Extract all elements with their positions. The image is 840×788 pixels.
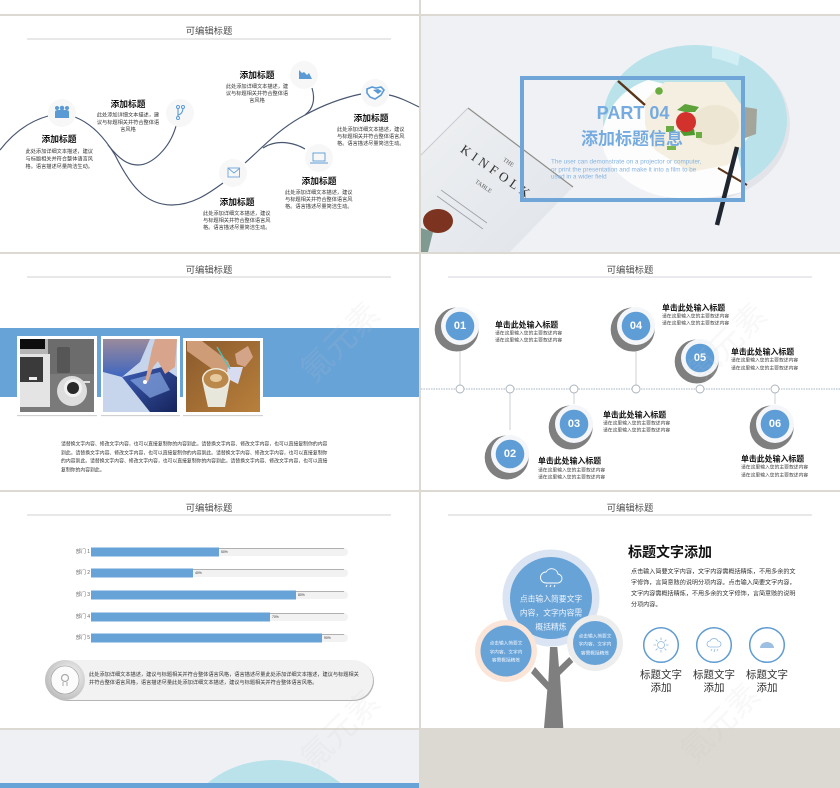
watermark 3: 氪元素 bbox=[293, 683, 387, 777]
right circle: 容需概括精炼 bbox=[581, 650, 609, 656]
node 02 bbox=[485, 435, 529, 480]
label 05 bbox=[731, 346, 798, 372]
label 04: 请在这里输入您的主要叙述内容 bbox=[662, 312, 729, 320]
heading: 标题文字添加 bbox=[628, 544, 712, 560]
panel: part 04 photo slide bbox=[421, 16, 840, 252]
label 03 bbox=[603, 410, 670, 434]
body text: 点击输入简要文字内容，文字内容需概括精炼，不用多余的文 bbox=[631, 568, 796, 576]
text block 4: 格。语言描述尽量简洁生动。 bbox=[337, 139, 404, 147]
blue frame bbox=[522, 78, 743, 200]
label 05: 单击此处输入标题 bbox=[731, 346, 794, 356]
body text: 分项内容。 bbox=[631, 600, 661, 608]
photo: laptop and coffee bbox=[17, 336, 97, 416]
bar 1 bbox=[76, 548, 348, 556]
bar 4: 70% bbox=[272, 615, 279, 619]
panel: cropped photo slide bbox=[0, 730, 419, 788]
body text: 请替换文字内容、修改文字内容，也可以直接复制你的内容到此。请替换文字内容、修改文字内容，也可以直接复制你的内容 bbox=[61, 440, 328, 448]
photo: coffee and notebook bbox=[183, 338, 263, 416]
bar chart bbox=[76, 548, 348, 642]
text block 3 bbox=[226, 69, 288, 104]
right circle bbox=[567, 615, 623, 671]
left circle: 容需概括精炼 bbox=[492, 656, 520, 664]
label 06: 单击此处输入标题 bbox=[741, 454, 804, 464]
big circle bbox=[502, 550, 600, 646]
panel: tree slide bbox=[421, 492, 840, 728]
icon: cloud bbox=[697, 628, 731, 662]
top strip left bbox=[0, 0, 419, 14]
body text bbox=[631, 568, 796, 608]
node 05: 05 bbox=[694, 352, 706, 364]
text block 4: 此处添加详细文本描述，建议 bbox=[337, 125, 405, 133]
slide title: 可编辑标题 bbox=[607, 502, 653, 513]
label 04: 单击此处输入标题 bbox=[662, 302, 725, 312]
text block 4: 与标题相关并符合整体语言风 bbox=[337, 132, 405, 140]
text block 4 bbox=[337, 112, 405, 147]
icon: area chart bbox=[290, 61, 318, 89]
watermark 2: 氪元素 bbox=[680, 296, 774, 390]
slide title: 可编辑标题 bbox=[607, 264, 653, 275]
callout text: 并符合整体语言风格，语言描述尽量此处添加详细文本描述，建议与标题相关并符合整体语言风格。 bbox=[89, 678, 317, 686]
text block 6: 添加标题 bbox=[220, 196, 255, 207]
slide title: 可编辑标题 bbox=[186, 25, 232, 36]
text block 5: 添加标题 bbox=[302, 175, 337, 186]
bar 3: 部门 3 bbox=[76, 591, 90, 598]
body text: 字修饰，言简意赅的说明分项内容。点击输入简要文字内容， bbox=[631, 578, 796, 586]
label 02: 请在这里输入您的主要叙述内容 bbox=[538, 466, 605, 474]
icon label 1 bbox=[640, 668, 682, 694]
label 03: 单击此处输入标题 bbox=[603, 410, 666, 420]
text block 5 bbox=[285, 175, 353, 210]
icon: sun bbox=[644, 628, 678, 662]
icon: people bbox=[48, 99, 76, 127]
text block 1: 格。语言描述尽量简洁生动。 bbox=[26, 162, 93, 170]
label 03: 请在这里输入您的主要叙述内容 bbox=[603, 426, 670, 434]
icon label 2: 标题文字 bbox=[693, 668, 735, 681]
label 04 bbox=[662, 302, 729, 326]
big circle: 内容，文字内容需 bbox=[520, 608, 582, 618]
label 06: 请在这里输入您的主要叙述内容 bbox=[741, 472, 808, 478]
text block 6 bbox=[203, 196, 271, 231]
text block 5: 与标题相关并符合整体语言风 bbox=[285, 195, 353, 203]
left circle bbox=[475, 620, 537, 682]
panel: numbered timeline slide bbox=[421, 254, 840, 490]
node 04 bbox=[611, 307, 655, 352]
heading: section title: 添加标题信息 bbox=[581, 128, 683, 148]
label 02: 请在这里输入您的主要叙述内容 bbox=[538, 474, 605, 480]
text block 2: 议与标题相关并符合整体语 bbox=[97, 118, 159, 126]
bar 5 bbox=[76, 634, 348, 642]
icon label 3 bbox=[746, 668, 788, 694]
watermark 1: 氪元素 bbox=[293, 295, 387, 389]
node 02: 02 bbox=[504, 448, 516, 460]
axis nodes bbox=[456, 385, 779, 393]
body text: 文字内容需概括精炼，不用多余的文字修饰，言简意赅的说明 bbox=[631, 590, 796, 598]
text block 6: 此处添加详细文本描述，建议 bbox=[203, 209, 271, 217]
text block 1: 此处添加详细文本描述，建议 bbox=[26, 147, 94, 155]
node 01 bbox=[435, 307, 479, 352]
heading: part 04: PART 04 bbox=[597, 103, 669, 123]
tree trunk bbox=[531, 647, 573, 728]
left circle: 字内容，文字内 bbox=[490, 648, 523, 656]
node 03: 03 bbox=[568, 418, 580, 430]
stems bbox=[460, 348, 775, 430]
photo: book: THE bbox=[501, 157, 515, 169]
english text bbox=[551, 158, 702, 180]
node 01: 01 bbox=[454, 320, 466, 332]
slide title: 可编辑标题 bbox=[186, 502, 232, 513]
photo: book bbox=[421, 108, 573, 252]
text block 3: 添加标题 bbox=[240, 69, 275, 80]
big circle: 概括精炼 bbox=[535, 622, 567, 632]
icon: handshake bbox=[361, 79, 389, 107]
body text: 复制你的内容到此。 bbox=[61, 466, 105, 474]
slide title: 可编辑标题 bbox=[186, 264, 232, 275]
label 06 bbox=[741, 454, 808, 478]
right circle: 点击输入简要文 bbox=[579, 632, 612, 640]
bar 5: 90% bbox=[324, 636, 331, 640]
text block 5: 此处添加详细文本描述，建议 bbox=[285, 188, 353, 196]
node 05 bbox=[675, 339, 719, 384]
curves bbox=[0, 88, 419, 205]
bar 2: 部门 2 bbox=[76, 569, 90, 576]
text block 5: 格。语言描述尽量简洁生动。 bbox=[285, 202, 352, 210]
body text: 的内容到此。请替换文字内容、修改文字内容，也可以直接复制你的内容到此。请替换文字内容、修改文字内容，也可以直接 bbox=[61, 458, 328, 464]
icon: badge bbox=[45, 660, 85, 700]
label 01: 单击此处输入标题 bbox=[495, 320, 558, 330]
photo: keyboard bbox=[101, 336, 180, 416]
label 01 bbox=[495, 320, 562, 344]
label 05: 请在这里输入您的主要叙述内容 bbox=[731, 364, 798, 372]
icon label 2: 添加 bbox=[704, 681, 724, 694]
icon: laptop bbox=[305, 144, 333, 172]
english text: or print the presentation and make it into a film to be bbox=[551, 166, 697, 174]
text block 4: 添加标题 bbox=[354, 112, 389, 123]
icon: branch bbox=[166, 99, 194, 127]
top strip right bbox=[421, 0, 840, 14]
text block 1 bbox=[26, 133, 94, 170]
bar 2 bbox=[76, 568, 348, 578]
dotted axis bbox=[421, 388, 840, 390]
body text bbox=[61, 440, 328, 474]
text block 3: 议与标题相关并符合整体语 bbox=[226, 89, 288, 97]
icon label 3: 添加 bbox=[756, 681, 778, 694]
panel: bar chart slide bbox=[0, 492, 419, 728]
text block 2: 此处添加详细文本描述，建 bbox=[97, 110, 159, 118]
icon label 2 bbox=[693, 668, 735, 694]
bar 4 bbox=[76, 612, 348, 622]
panel: curve timeline slide bbox=[0, 16, 419, 252]
left circle: 点击输入简要文 bbox=[490, 640, 523, 646]
photo: book: TABLE bbox=[474, 179, 493, 195]
bar 4: 部门 4 bbox=[76, 613, 90, 620]
watermark 4: 氪元素 bbox=[673, 676, 767, 770]
text block 6: 格。语言描述尽量简洁生动。 bbox=[203, 223, 270, 231]
node 06: 06 bbox=[769, 418, 781, 430]
bar 5: 部门 5 bbox=[76, 634, 90, 641]
label 05: 请在这里输入您的主要叙述内容 bbox=[731, 356, 798, 364]
icon label 1: 标题文字 bbox=[640, 668, 682, 681]
callout pill bbox=[45, 660, 374, 701]
text block 6: 与标题相关并符合整体语言风 bbox=[203, 216, 271, 224]
node 04: 04 bbox=[630, 320, 643, 332]
icon: rain cloud bbox=[540, 569, 562, 587]
node 03 bbox=[549, 405, 593, 450]
label 02 bbox=[538, 456, 605, 480]
bar 2: 40% bbox=[195, 571, 202, 575]
big circle: 点击输入简要文字 bbox=[520, 594, 582, 604]
icon label 1: 添加 bbox=[650, 681, 672, 694]
text block 1: 添加标题 bbox=[42, 133, 77, 144]
english text: used in a wider field bbox=[551, 174, 607, 180]
icon: dome bbox=[750, 628, 784, 662]
bar 3 bbox=[76, 590, 348, 600]
label 03: 请在这里输入您的主要叙述内容 bbox=[603, 420, 670, 426]
icon: mail bbox=[219, 159, 247, 187]
photo: book: KINFOLK bbox=[458, 141, 536, 203]
bar 1: 部门 1 bbox=[76, 548, 90, 555]
panel: photo band slide bbox=[0, 254, 419, 490]
bar 3: 80% bbox=[298, 593, 305, 597]
body text: 到此。请替换文字内容、修改文字内容，也可以直接复制你的内容到此。请替换文字内容、修改文字内容，也可以直接复制你 bbox=[61, 450, 328, 456]
bar 1: 50% bbox=[221, 550, 228, 554]
right circle: 字内容，文字内 bbox=[579, 640, 612, 648]
text block 2: 言风格 bbox=[120, 125, 137, 133]
label 01: 请在这里输入您的主要叙述内容 bbox=[495, 336, 562, 344]
english text: The user can demonstrate on a projector or computer, bbox=[551, 158, 702, 166]
blue band bbox=[0, 328, 419, 397]
text block 3: 言风格 bbox=[249, 96, 266, 104]
callout text bbox=[89, 670, 359, 686]
label 04: 请在这里输入您的主要叙述内容 bbox=[662, 320, 729, 326]
node 06 bbox=[750, 405, 794, 450]
icon label 3: 标题文字 bbox=[746, 668, 788, 681]
text block 2: 添加标题 bbox=[110, 98, 146, 109]
text block 3: 此处添加详细文本描述，建 bbox=[226, 82, 288, 90]
label 06: 请在这里输入您的主要叙述内容 bbox=[741, 464, 808, 470]
text block 2 bbox=[97, 98, 159, 133]
photo: plate bbox=[602, 45, 790, 225]
callout text: 此处添加详细文本描述，建议与标题相关并符合整体语言风格，语言描述尽量此处添加详细文本描述，建议与标题相关 bbox=[89, 670, 359, 678]
label 02: 单击此处输入标题 bbox=[538, 456, 601, 466]
text block 1: 与标题相关并符合整体语言风 bbox=[26, 154, 94, 162]
label 01: 请在这里输入您的主要叙述内容 bbox=[495, 330, 562, 336]
